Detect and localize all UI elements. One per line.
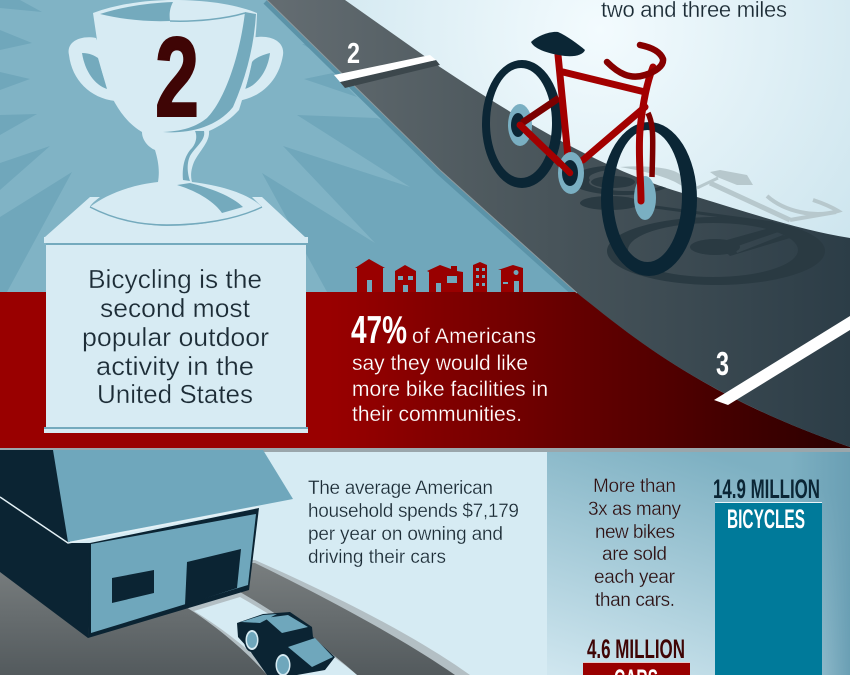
seat stay <box>522 98 559 123</box>
number 2: 2 <box>155 14 199 140</box>
bar chart: cars <box>583 634 690 675</box>
bar chart: bicycles <box>713 474 822 675</box>
text: household car cost: household spends $7,179 <box>308 501 519 522</box>
garage door <box>185 549 241 605</box>
bike shadow on sky <box>620 166 838 220</box>
saddle <box>531 32 585 56</box>
panel: lower right <box>547 450 850 675</box>
right handle <box>238 37 283 101</box>
front fork <box>639 67 653 201</box>
text: second most popular: activity in the <box>96 351 254 381</box>
cup opening <box>100 2 173 21</box>
text: second most popular <box>82 264 269 409</box>
panel: red band <box>0 292 850 448</box>
text: more than 3x: than cars. <box>595 590 675 611</box>
rear hub <box>508 104 532 146</box>
text: more than 3x: 3x as many <box>588 499 682 520</box>
bar chart: cars: 4.6 MILLION <box>587 634 685 664</box>
text: more than 3x: new bikes <box>595 522 675 543</box>
rear wheel <box>482 60 562 188</box>
road edge strip <box>267 0 577 293</box>
rear fork <box>648 113 653 177</box>
icon: house with garage <box>0 450 293 638</box>
road edge highlight <box>267 0 577 293</box>
text: second most popular: popular outdoor <box>82 322 269 352</box>
bike shadow on road <box>570 165 825 285</box>
trophy <box>69 0 283 225</box>
text: household car cost <box>308 478 519 568</box>
stem shading <box>183 131 204 181</box>
road marking: mile 3 <box>714 316 850 405</box>
cup rim line <box>170 13 245 21</box>
road <box>267 0 850 447</box>
driveway <box>186 592 357 675</box>
text: 47 percent callout <box>351 309 548 426</box>
text: household car cost: The average American <box>308 478 493 499</box>
road marking: mile 3: 3 <box>716 345 729 382</box>
base shading <box>177 183 243 213</box>
front hub <box>634 176 656 220</box>
text: more than 3x: each year <box>594 567 676 588</box>
text: second most popular: United States <box>97 379 253 409</box>
divider shadow under red band <box>0 448 850 452</box>
roof <box>53 450 293 542</box>
panel: trophy background with rays <box>0 0 577 293</box>
crank <box>555 152 584 194</box>
front wall <box>88 508 259 638</box>
text: more than 3x <box>588 476 682 611</box>
house side <box>0 450 92 638</box>
text: household car cost: per year on owning and <box>308 524 503 545</box>
text: more than 3x: More than <box>593 476 676 497</box>
road marking: mile 2 <box>334 38 440 88</box>
text: 47 percent callout: 47% <box>351 309 407 352</box>
text: 47 percent callout: their communities. <box>352 403 522 426</box>
left handle <box>69 37 115 101</box>
cup shading <box>163 12 256 132</box>
cup <box>90 0 262 225</box>
panel: lower left <box>0 450 546 675</box>
road marking: mile 2: 2 <box>347 38 360 70</box>
handlebar <box>607 45 663 77</box>
text: 47 percent callout: more bike facilities in <box>352 378 548 401</box>
text: 47 percent callout: say they would like <box>352 352 528 375</box>
icon: car <box>237 612 335 675</box>
pedestal top <box>45 197 305 237</box>
icon: row of houses <box>355 259 523 292</box>
base rim line <box>90 207 262 225</box>
right handle hole <box>245 53 270 89</box>
icon: red bicycle <box>482 32 697 276</box>
text: second most popular: second most <box>100 293 251 323</box>
text: 47 percent callout: of Americans <box>412 325 536 348</box>
eave line <box>0 497 258 543</box>
window <box>112 570 154 603</box>
front wheel <box>601 122 697 276</box>
text: second most popular: Bicycling is the <box>88 264 262 294</box>
ground and road <box>0 560 470 675</box>
main frame <box>520 55 645 173</box>
text: more than 3x: are sold <box>602 544 667 565</box>
sky background <box>0 0 850 450</box>
pedestal card with text <box>44 237 308 433</box>
text: household car cost: driving their cars <box>308 547 446 568</box>
left handle hole <box>82 53 107 89</box>
